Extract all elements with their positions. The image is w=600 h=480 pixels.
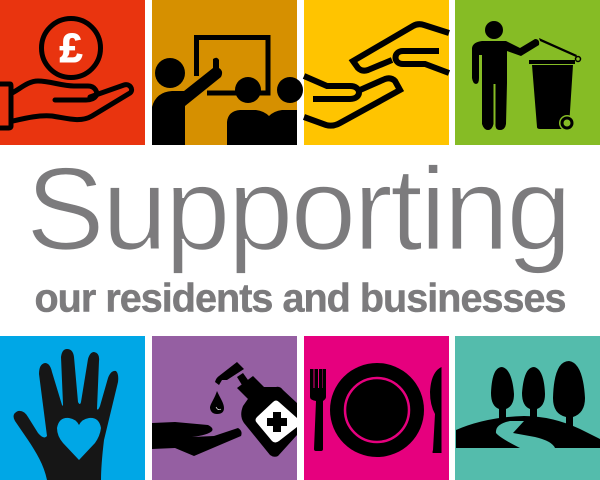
panel: hand hygiene: [152, 336, 297, 480]
icon: teacher pointing: [152, 58, 222, 145]
panel: helping hands: [304, 0, 449, 145]
icon: pound coin: £: [60, 25, 83, 71]
icon: plate: [330, 363, 424, 457]
icon: trees: [491, 361, 585, 430]
panel: food: [304, 336, 449, 480]
icon: fork: [310, 369, 326, 451]
icon: open hand: [0, 81, 132, 128]
icon: sanitiser bottle: [215, 362, 297, 457]
icon: pound coin: [42, 18, 100, 78]
icon: upper hand: [353, 24, 449, 73]
subtitle: our residents and businesses: [34, 276, 566, 320]
icon: whiteboard: [196, 38, 268, 93]
panel: financial support: [0, 0, 145, 145]
icon: hill with river: [456, 416, 600, 448]
icon: lower hand: [304, 76, 400, 126]
panel: parks and green spaces: [455, 336, 600, 480]
icon: knife: [430, 367, 442, 453]
panel: recycling and waste: [455, 0, 600, 145]
icon: wheelie bin: [529, 38, 580, 131]
icon: hand: [152, 422, 242, 456]
title: Supporting: [26, 144, 572, 276]
icon: students: [227, 77, 303, 145]
icon: drop: [210, 391, 224, 414]
panel: education: [152, 0, 303, 145]
icon: hand with heart: [14, 349, 118, 480]
panel: volunteering: [0, 336, 145, 480]
icon: person using bin: [472, 21, 539, 130]
